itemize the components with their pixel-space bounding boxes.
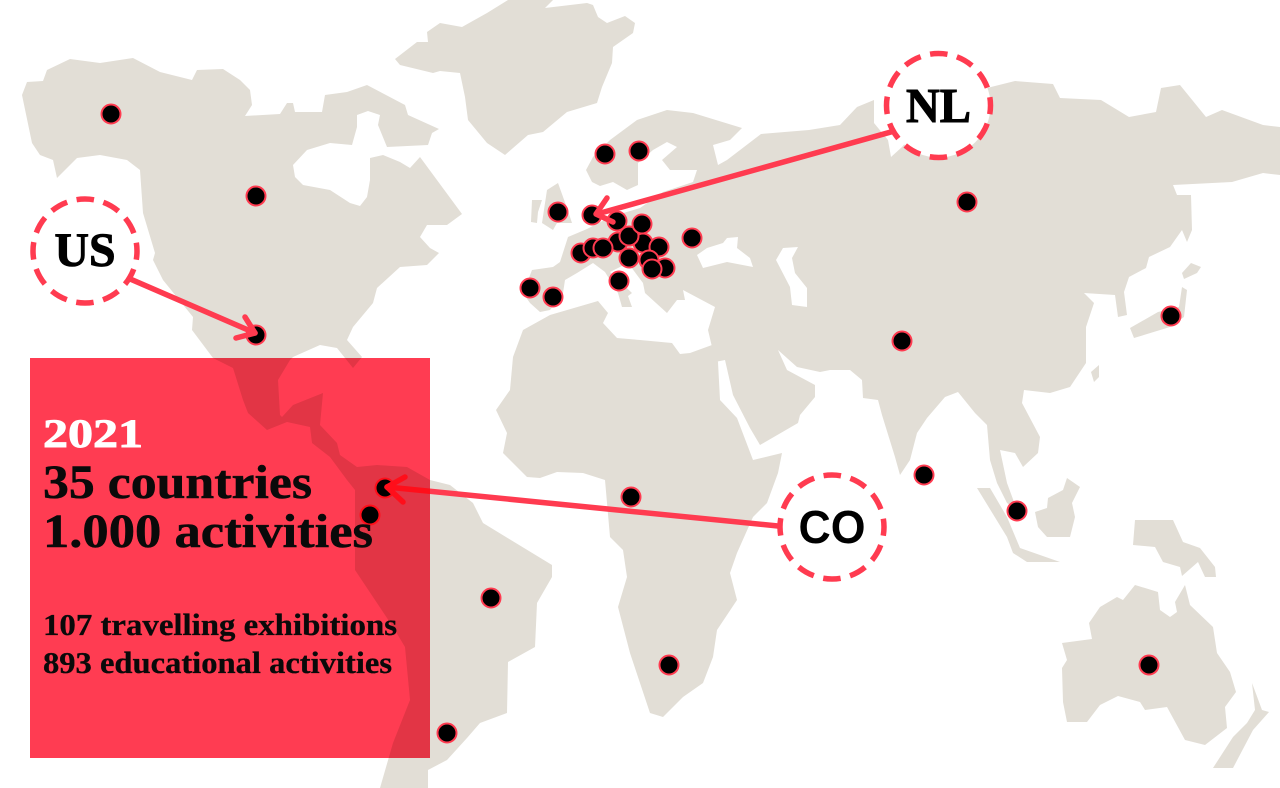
- map: Eurasia: [523, 81, 1280, 510]
- badge: CO: CO: [798, 501, 866, 553]
- map: Hokkaido: [1182, 263, 1201, 279]
- map: New Guinea: [1133, 520, 1216, 577]
- arrow: NL to Netherlands: [596, 132, 891, 222]
- map: North and South America: [22, 58, 552, 788]
- text: educational activities: 893 educational activities: [43, 645, 392, 680]
- arrow: US to United States: [128, 278, 255, 338]
- map: Borneo: [1035, 478, 1080, 537]
- map: New Zealand: [1213, 683, 1269, 768]
- text: activities count: 1.000 activities: [43, 505, 373, 558]
- map: Japan: [1130, 287, 1187, 338]
- badge: US: [33, 199, 137, 303]
- map: Australia: [1062, 585, 1236, 745]
- badge: US: US: [54, 224, 116, 277]
- map: Sumatra: [977, 488, 1060, 562]
- heading: year: 2021: [43, 411, 143, 456]
- map: Britain: [542, 183, 572, 230]
- arrow: CO to Colombia: [387, 477, 778, 526]
- map: Greenland: [395, 0, 635, 155]
- location dots: [102, 104, 1180, 742]
- map: Ireland: [531, 200, 542, 223]
- panel text: 2021 figures: [43, 411, 397, 680]
- badge: NL: [886, 54, 990, 158]
- text: travelling exhibitions: 107 travelling exhibitions: [43, 607, 397, 642]
- panel: 2021 summary background: [30, 358, 430, 758]
- badge: NL: NL: [906, 78, 971, 133]
- text: countries count: 35 countries: [43, 456, 312, 509]
- map: Taiwan: [1091, 365, 1099, 382]
- map: Africa: [496, 301, 782, 717]
- badge: CO: [780, 475, 884, 579]
